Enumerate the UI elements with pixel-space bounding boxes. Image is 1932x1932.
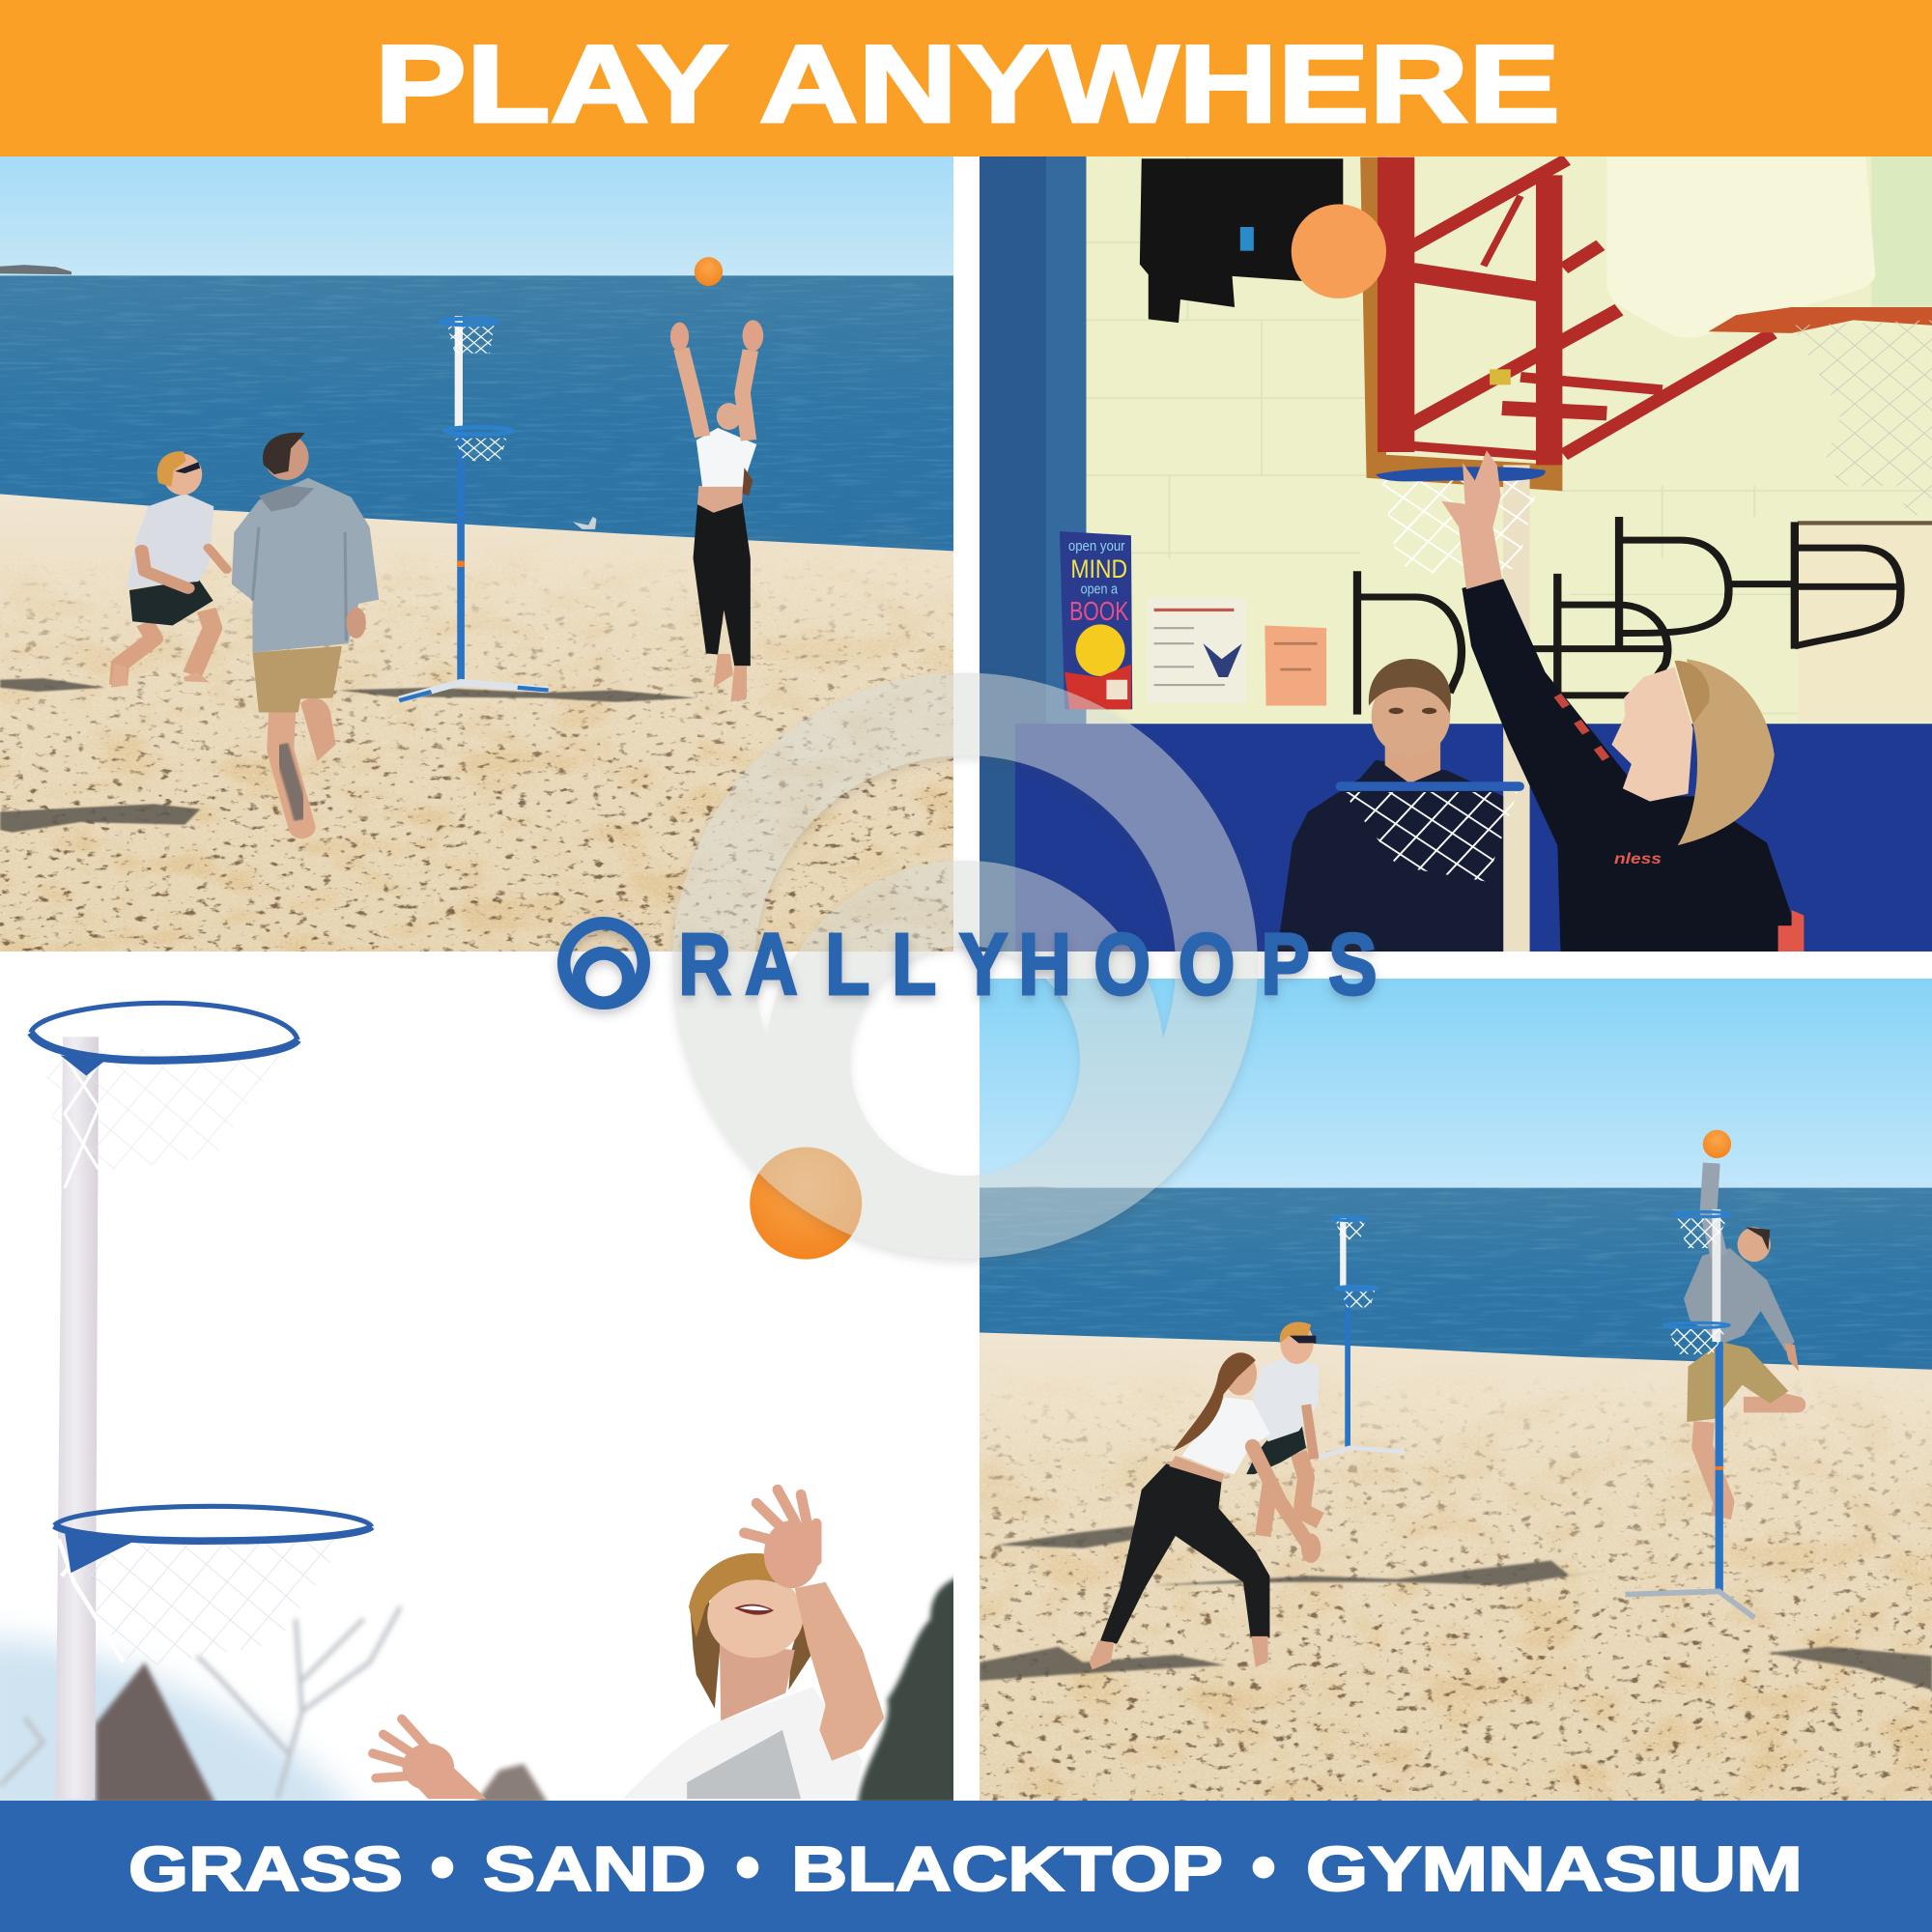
photo panel: beach game top left [0, 155, 953, 952]
footer banner [0, 1801, 1932, 1932]
photo panel: close-up player bottom left [0, 948, 972, 1829]
surface list: • [430, 1829, 455, 1906]
sky [0, 155, 953, 276]
spiking player [1684, 1163, 1799, 1518]
blurred background trees [0, 1576, 961, 1804]
shadows on sand [0, 678, 696, 833]
shadows on sand [980, 1525, 1932, 1690]
reading poster: open your [1068, 538, 1125, 554]
sand [0, 494, 953, 952]
photo panel: beach game bottom right [980, 979, 1932, 1804]
portable hoop pole [1503, 465, 1530, 952]
reading poster: open a [1081, 582, 1119, 597]
logo wordmark: RALLYHOOPS [678, 916, 1378, 1012]
gym wall [1086, 156, 1932, 724]
reading poster: MIND [1070, 555, 1127, 584]
blue wall padding [1015, 724, 1932, 962]
far hoop stand [1318, 1217, 1405, 1458]
reading poster: BOOK [1069, 597, 1129, 626]
surface list [128, 1829, 1803, 1906]
surface list: GRASS [128, 1833, 403, 1904]
ball at hand [1703, 1130, 1731, 1158]
header banner [0, 0, 1932, 156]
player shooting: nless [1614, 849, 1662, 867]
water [0, 275, 953, 555]
defending player with ponytail [1090, 1352, 1321, 1669]
wall notice [1147, 598, 1246, 703]
ball in flight [695, 257, 723, 286]
bright sky [0, 948, 953, 1829]
player in white shirt [111, 451, 227, 688]
surface list: GYMNASIUM [1306, 1833, 1803, 1904]
logo icon [557, 917, 650, 1009]
wall speaker [1140, 158, 1343, 323]
crouching player [1246, 1322, 1321, 1536]
backboard support frame [1360, 157, 1774, 491]
backboard [1606, 157, 1875, 338]
surface list: BLACKTOP [791, 1833, 1223, 1904]
game hoop stand [399, 316, 549, 700]
player shooting [1441, 450, 1804, 952]
ball above hoop [1292, 204, 1386, 298]
upper blue hoop and net [1376, 467, 1546, 574]
distant shoreline [980, 1186, 1093, 1193]
sand [980, 1332, 1932, 1804]
photo panel: gymnasium top right [980, 155, 1932, 962]
logo watermark [672, 673, 1258, 1259]
distant island [0, 265, 71, 274]
surface list: SAND [483, 1833, 706, 1904]
reading poster [1060, 531, 1132, 709]
title: PLAY ANYWHERE [375, 23, 1560, 146]
white gutter beside panel [953, 1570, 972, 1804]
surface list: • [735, 1829, 760, 1906]
Rally Hoops logo [557, 916, 1378, 1012]
laughing player [373, 1490, 884, 1799]
blue wall pillar [980, 155, 1086, 962]
sky [980, 979, 1932, 1193]
lower blue hoop and net [1336, 781, 1524, 882]
orange ball [750, 1148, 862, 1260]
orange basketball rim and net [1709, 307, 1932, 517]
hoop pole [55, 1037, 99, 1799]
wall bike hooks [1357, 517, 1900, 715]
player reaching for ball [670, 320, 763, 702]
near hoop stand [1625, 1209, 1754, 1618]
upper hoop and net [31, 1003, 298, 1188]
surface list: • [1251, 1829, 1276, 1906]
player in grey hoodie [232, 433, 379, 827]
water [980, 1188, 1932, 1373]
lower hoop and net [54, 1506, 372, 1668]
seagull [573, 517, 596, 529]
player standing behind hoop [1277, 659, 1503, 952]
orange notice [1264, 625, 1326, 706]
